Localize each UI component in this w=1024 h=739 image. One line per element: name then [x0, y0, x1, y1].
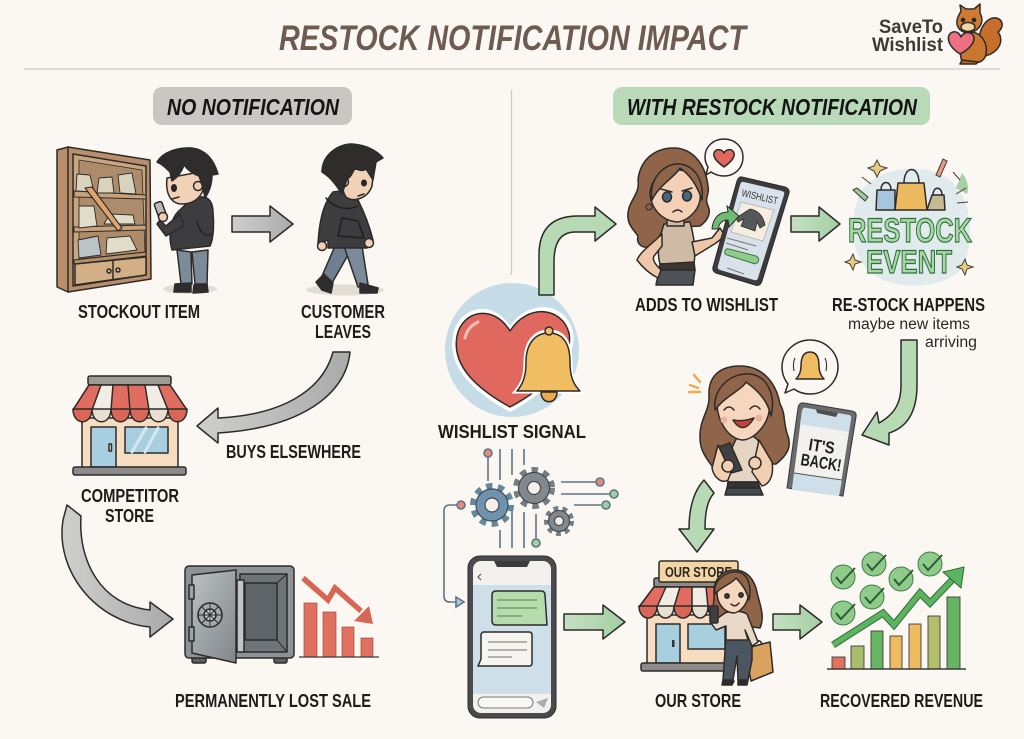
bars	[832, 597, 960, 669]
icon: phone saying it's back	[787, 403, 856, 496]
arrow: curved to competitor	[197, 352, 350, 443]
icon: bell speech bubble	[782, 340, 838, 394]
character: boy walking away	[306, 144, 384, 296]
arrow: green to revenue	[773, 605, 822, 639]
panel: wishlist signal	[438, 207, 625, 718]
arrow: green curved up to wishlist	[539, 207, 616, 295]
icon: heart speech bubble	[705, 139, 743, 176]
label: stockout item: STOCKOUT ITEM	[78, 302, 200, 322]
icon: heart and bell	[445, 283, 580, 417]
heading: no notification: NO NOTIFICATION	[167, 94, 340, 120]
icon: our store	[639, 561, 738, 671]
arrow: green curved down to phone	[862, 340, 917, 445]
label: competitor store: STORE	[105, 506, 154, 526]
label: customer leaves: CUSTOMER	[301, 302, 385, 322]
chart: recovered revenue	[827, 552, 966, 669]
icon: sparkles	[845, 159, 973, 275]
character: happy woman	[689, 366, 789, 495]
arrow: green down to our store	[679, 480, 714, 552]
arrow: rising trend line	[833, 567, 964, 645]
arrow: curved to lost sale	[62, 505, 173, 637]
icon: phone with messages	[468, 556, 556, 718]
label: re-stock happens: RE-STOCK HAPPENS	[832, 295, 985, 315]
label: buys elsewhere: BUYS ELSEWHERE	[226, 442, 361, 462]
icon: gears	[474, 471, 571, 533]
icon: squirrel	[957, 4, 1002, 64]
heading: no notification	[153, 87, 352, 125]
label: wishlist signal: WISHLIST SIGNAL	[438, 422, 586, 442]
character: woman shopping	[710, 570, 773, 685]
icon: phone saying it's back: BACK!	[799, 450, 843, 475]
panel: with restock notification	[613, 87, 985, 711]
arrow: green to restock event	[791, 207, 840, 241]
icon: pink heart	[948, 32, 974, 54]
label: recovered revenue: RECOVERED REVENUE	[820, 691, 983, 711]
text: restock event: EVENT	[866, 244, 952, 280]
label: our store: OUR STORE	[655, 691, 741, 711]
icon: phone showing wishlist: WISHLIST	[740, 188, 779, 207]
icon: open safe	[185, 566, 294, 663]
icon: phone showing wishlist	[712, 177, 789, 286]
arrow: green to store	[564, 605, 625, 639]
heading: with restock notification: WITH RESTOCK NOTIFICATION	[627, 94, 918, 120]
icon: check badges	[831, 552, 942, 625]
icon: phone saying it's back: IT'S	[807, 435, 836, 458]
character: woman adding to wishlist	[628, 148, 725, 285]
icon: our store: OUR STORE	[665, 565, 732, 581]
text: restock event	[848, 212, 972, 280]
label: customer leaves: LEAVES	[315, 322, 371, 342]
text: maybe new items arriving: maybe new items	[848, 316, 970, 333]
text: maybe new items arriving: arriving	[925, 334, 977, 351]
label: customer leaves	[301, 302, 385, 342]
text: maybe new items arriving	[848, 316, 977, 351]
text: restock event: RESTOCK	[848, 212, 972, 250]
logo: SaveToWishlist squirrel	[872, 4, 1002, 64]
icon: restock event	[845, 159, 973, 286]
logo text: SaveTo	[879, 17, 943, 38]
title: RESTOCK NOTIFICATION IMPACT	[279, 19, 748, 58]
label: competitor store	[81, 486, 179, 526]
icon: shopping bags	[876, 170, 945, 210]
icon: empty bookshelf	[57, 147, 151, 292]
label: adds to wishlist: ADDS TO WISHLIST	[635, 295, 778, 315]
icon: competitor store	[73, 376, 187, 475]
logo text: Wishlist	[872, 35, 944, 56]
character: boy with phone	[154, 148, 218, 294]
panel: no notification	[57, 87, 385, 711]
chart: falling bars	[299, 578, 379, 657]
label: competitor store: COMPETITOR	[81, 486, 179, 506]
logo text	[872, 17, 944, 56]
header rule	[24, 68, 1000, 70]
arrow: gray right	[232, 206, 293, 242]
icon: connector lines and nodes	[444, 449, 618, 607]
label: permanently lost sale: PERMANENTLY LOST SALE	[175, 691, 371, 711]
heading: with restock notification	[613, 87, 930, 125]
